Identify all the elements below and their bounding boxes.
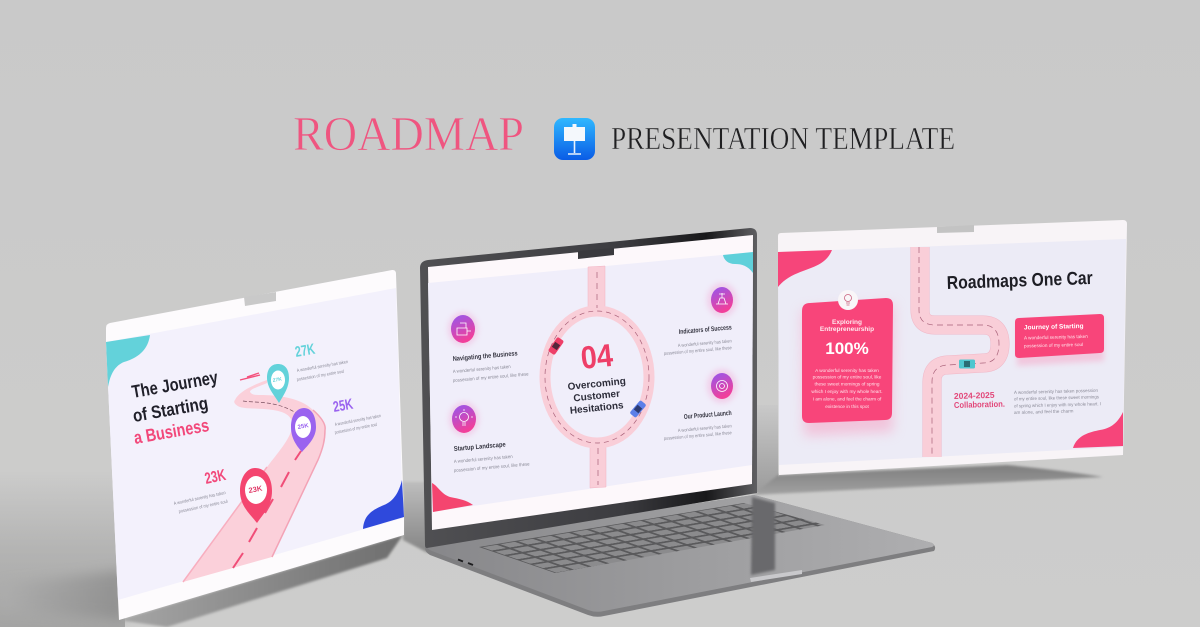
text: our product launch: Our Product Launch	[684, 410, 732, 421]
ports	[458, 560, 473, 565]
text: collaboration description	[1014, 388, 1101, 415]
stat: 25K: 25K	[332, 396, 355, 416]
text: our product launch	[664, 410, 732, 441]
text: indicators of success	[664, 324, 732, 356]
heading: roadmaps one car: Roadmaps One Car	[946, 267, 1093, 293]
heading: overcoming customer hesitations: Customer	[573, 389, 621, 404]
text: our product launch: possession of my entire soul, like these	[664, 430, 732, 441]
stat: 27K: 27K	[294, 341, 317, 361]
text: indicators of success: A wonderful serenity has taken	[678, 338, 732, 348]
blob: pink top left	[778, 250, 832, 287]
stat: 25K: A wonderful serenity has taken	[334, 413, 382, 427]
stat: 23K: A wonderful serenity has taken	[173, 490, 226, 506]
keyboard	[479, 503, 825, 573]
icon: navigating the business	[448, 312, 478, 346]
heading: the journey of starting a business: a Business	[132, 415, 211, 448]
text: collaboration description: A wonderful serenity has taken possession	[1014, 388, 1098, 395]
road: winding	[919, 247, 1000, 457]
text: 2024-2025 collaboration: 2024-2025	[954, 390, 995, 401]
card: journey of starting	[1015, 314, 1104, 366]
text: collaboration description: of spring which I enjoy with my whole heart. I	[1014, 401, 1101, 408]
card: journey of starting: A wonderful serenity has taken	[1024, 334, 1088, 340]
stat: 27K	[294, 341, 349, 382]
text: navigating the business: A wonderful serenity has taken	[453, 364, 511, 374]
stat: 25K: possession of my entire soul	[334, 422, 377, 435]
text: indicators of success: possession of my entire soul, like these	[664, 345, 732, 356]
card: exploring entrepreneurship: Exploring	[832, 319, 862, 326]
camera notch	[937, 225, 974, 233]
card: exploring entrepreneurship: I am alone, and feel the charm of	[813, 396, 882, 402]
card: exploring entrepreneurship: existence in this spot	[825, 404, 869, 409]
slide background	[778, 239, 1126, 465]
stat: 27K: A wonderful serenity has taken	[296, 359, 349, 373]
stat: 25K	[332, 396, 382, 435]
road: winding	[183, 373, 325, 582]
slide frame	[778, 220, 1127, 475]
road centre dashes	[597, 272, 598, 485]
blob: teal	[106, 335, 150, 387]
card: exploring entrepreneurship: which I enjoy with my whole heart.	[811, 389, 883, 394]
panel: right slide	[778, 220, 1127, 475]
laptop base	[425, 495, 935, 617]
stat: 23K	[173, 467, 228, 514]
stat: 23K: 23K	[203, 467, 228, 488]
pin: 27K	[267, 364, 289, 403]
blob: teal corner	[723, 252, 753, 273]
icon: startup landscape	[449, 402, 479, 436]
blob: pink corner	[432, 483, 473, 512]
card: exploring entrepreneurship: A wonderful serenity has taken	[815, 368, 879, 373]
slide background	[428, 252, 753, 512]
card: exploring entrepreneurship: Entrepreneurship	[820, 326, 874, 333]
reflection band	[751, 497, 775, 575]
icon: lightbulb badge	[838, 290, 858, 310]
text: navigating the business	[453, 350, 529, 383]
car: blue	[629, 400, 647, 418]
icon: our product launch	[707, 369, 737, 403]
text: startup landscape: Startup Landscape	[454, 441, 506, 453]
blob: pink bottom right	[1073, 412, 1123, 448]
heading: the journey of starting a business: The Journey	[130, 367, 219, 402]
stat: 23K: possession of my entire soul	[178, 499, 228, 514]
text: 2024-2025 collaboration	[954, 390, 1005, 410]
shadow: left slide	[0, 470, 428, 627]
text: startup landscape	[454, 441, 530, 473]
shadow: right slide	[753, 405, 1103, 495]
slide frame	[106, 270, 404, 620]
icon: keynote app	[554, 118, 595, 160]
text: startup landscape: possession of my entire soul, like these	[454, 461, 530, 473]
pin: 27K: 27K	[272, 376, 283, 384]
text: indicators of success: Indicators of Success	[679, 324, 732, 336]
card: journey of starting: Journey of Starting	[1024, 323, 1084, 331]
heading: overcoming customer hesitations: Hesitations	[569, 400, 625, 417]
screen frame	[428, 235, 753, 530]
text: 2024-2025 collaboration: Collaboration.	[954, 399, 1005, 410]
text: navigating the business: Navigating the Business	[453, 350, 518, 363]
car: red	[548, 337, 564, 355]
title: ROADMAP: ROADMAP	[293, 106, 524, 161]
laptop lid	[420, 228, 757, 548]
road: ring	[545, 311, 649, 443]
camera notch	[578, 248, 614, 259]
pin: 25K	[291, 408, 316, 452]
text: collaboration description: am alone, and feel the charm	[1014, 408, 1074, 415]
heading: overcoming customer hesitations	[567, 376, 626, 417]
blob: blue	[363, 480, 404, 529]
icon: indicators of success	[707, 283, 737, 317]
road: vertical	[588, 266, 606, 488]
pin: 23K	[240, 468, 272, 523]
pin: 25K: 25K	[297, 423, 310, 431]
text: navigating the business: possession of my entire soul, like these	[453, 371, 529, 383]
text: startup landscape: A wonderful serenity has taken	[454, 454, 513, 464]
text: our product launch: A wonderful serenity has taken	[678, 423, 732, 433]
heading: overcoming customer hesitations: Overcoming	[567, 376, 626, 393]
panel: left slide	[106, 270, 404, 620]
trackpad notch	[750, 570, 802, 582]
heading: the journey of starting a business	[130, 367, 219, 448]
text: collaboration description: of my entire soul, like these sweet mornings	[1014, 394, 1100, 401]
ring centre line	[545, 311, 649, 443]
card: exploring entrepreneurship: possession of my entire soul, like	[813, 374, 882, 380]
subtitle: presentation template: PRESENTATION TEMPLATE	[611, 120, 955, 156]
heading: 04: 04	[579, 337, 615, 376]
heading: the journey of starting a business: of Starting	[131, 393, 210, 426]
pin: 23K: 23K	[248, 484, 263, 495]
card: exploring entrepreneurship: these sweet mornings of spring	[815, 382, 880, 386]
card: exploring entrepreneurship	[802, 290, 894, 436]
stat: 27K: possession of my entire soul	[296, 369, 344, 382]
stat: 100%: 100%	[825, 339, 869, 358]
card: journey of starting: possession of my entire soul	[1024, 342, 1083, 348]
car: teal	[959, 360, 975, 368]
